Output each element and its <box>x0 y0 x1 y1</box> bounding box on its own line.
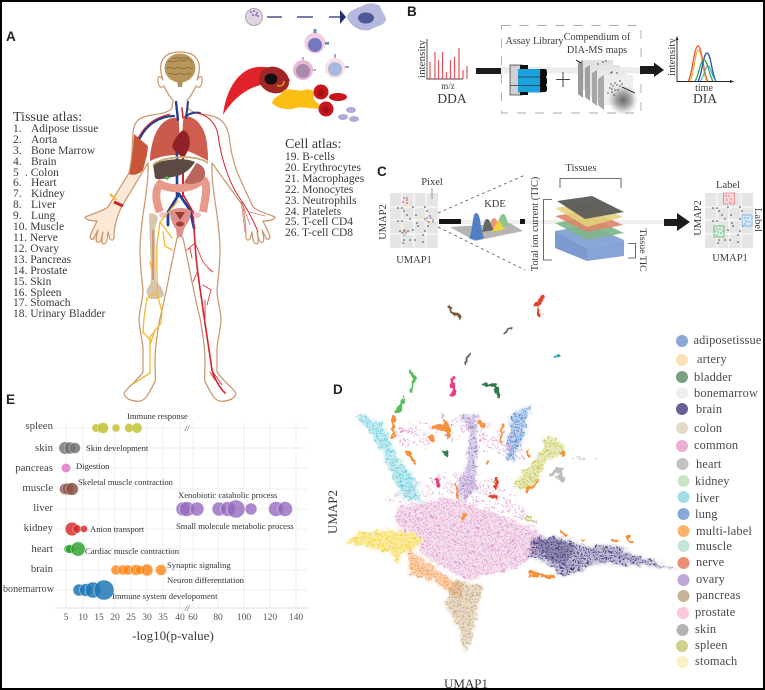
tissue atlas list: 1. <box>13 123 22 135</box>
tissue atlas list: Tissue atlas: <box>13 110 82 125</box>
legend: stomach <box>695 654 738 668</box>
tissue atlas list: 3. <box>13 145 22 157</box>
tissue atlas list: Lung <box>31 210 56 222</box>
DDA spectrum chart: DDA <box>437 91 467 106</box>
tissue atlas list: 18. Urinary Bladder <box>13 308 105 320</box>
panel C: KDE labelling workflow <box>377 163 763 272</box>
cell atlas list: 19. B-cells <box>285 151 335 163</box>
input UMAP pixel grid: UMAP1 <box>396 255 432 266</box>
category labels: spleen <box>25 420 54 432</box>
panel B: DDA to DIA workflow <box>407 4 734 115</box>
DIA chromatogram chart <box>666 36 734 106</box>
bubble annotations: Immune response <box>127 411 188 421</box>
skin clusters <box>466 328 513 363</box>
diaphragm <box>153 157 208 165</box>
tissue atlas list: Heart <box>31 177 57 189</box>
bubble annotations: Anion transport <box>90 524 145 534</box>
blood vessel cross section <box>223 62 293 115</box>
pancreas cluster <box>445 580 483 655</box>
bladder cluster <box>445 385 498 456</box>
stacked DIA map cards <box>576 60 638 115</box>
gall bladder <box>165 176 169 180</box>
nerves <box>133 201 178 384</box>
bubble annotations: Digestion <box>76 461 110 471</box>
wristband <box>114 202 123 206</box>
UMAP scatter points <box>345 297 677 655</box>
wrist tag <box>110 194 116 200</box>
x axis tick labels: 30 <box>142 612 152 623</box>
category labels: liver <box>33 502 53 514</box>
tissue atlas list: 11. Nerve <box>13 232 58 244</box>
body fill <box>85 52 275 401</box>
tissues label: Tissues <box>565 163 597 174</box>
tissue atlas list: 7. <box>13 188 22 200</box>
compendium label line 2: DIA-MS maps <box>567 45 627 56</box>
DIA chromatogram chart: DIA <box>693 91 717 106</box>
pink sparse strips <box>398 413 512 450</box>
category labels: skin <box>35 442 54 454</box>
bubble annotations: Small molecule metabolic process <box>176 521 294 531</box>
bubble annotations <box>76 411 294 601</box>
panel label C: C <box>377 164 387 179</box>
bubble annotations: Immune system developoment <box>112 591 218 601</box>
tissue atlas list: Brain <box>31 156 57 168</box>
tissue atlas list: Kidney <box>31 188 65 200</box>
dashed box <box>502 26 641 113</box>
liver <box>153 159 195 179</box>
body outline <box>85 52 275 401</box>
heart <box>172 130 190 157</box>
KDE plot <box>450 199 523 241</box>
DDA spectrum chart: intensity <box>416 40 428 78</box>
x axis title: -log10(p-value) <box>132 628 214 643</box>
x axis tick labels: 5 <box>64 612 69 623</box>
panel A: human body tissue and cell atlas <box>6 3 386 401</box>
arrow to labelled UMAP <box>664 213 690 231</box>
x axis tick labels: 120 <box>263 612 277 623</box>
multi-label cluster <box>407 547 463 597</box>
liver cluster <box>354 413 423 502</box>
legend: nerve <box>696 555 725 569</box>
nerve cluster <box>491 297 543 498</box>
assay library cartridge <box>510 65 547 95</box>
x axis tick labels: 140 <box>289 612 303 623</box>
legend: muscle <box>696 539 732 553</box>
legend: skin <box>695 622 716 636</box>
femur bone <box>147 213 164 299</box>
axis label total ion current: Total ion current (TIC) <box>530 177 541 271</box>
black arrow segment <box>476 68 501 74</box>
output labelled UMAP: Label <box>716 180 740 191</box>
veins and arteries upper body <box>138 102 265 232</box>
x axis tick labels: 35 <box>158 612 168 623</box>
tissue atlas list: Bone Marrow <box>31 145 96 157</box>
compendium label: Compendium of <box>564 32 631 43</box>
legend: colon <box>694 421 722 435</box>
dashed zoom lines <box>438 175 525 270</box>
tissue layer stack <box>555 196 624 261</box>
tissue atlas list: 12. Ovary <box>13 243 59 255</box>
legend: ovary <box>696 572 726 586</box>
tissue atlas list: Aorta <box>31 134 57 146</box>
output labelled UMAP: Label <box>752 208 763 232</box>
bonemarrow cluster <box>573 457 597 459</box>
legend: kidney <box>695 474 730 488</box>
panel label E: E <box>6 392 15 407</box>
cell atlas list <box>285 137 365 239</box>
spleen cluster <box>513 435 563 490</box>
small spleen group <box>525 518 536 520</box>
cell atlas list: 22. Monocytes <box>285 184 354 196</box>
bubble annotations: Skeletal muscle contraction <box>78 477 174 487</box>
category labels <box>3 420 54 595</box>
legend: bonemarrow <box>694 386 758 400</box>
panel E: enrichment bubble chart <box>3 392 308 643</box>
legend: prostate <box>695 605 736 619</box>
bubble annotations: Xenobiotic catabolic process <box>178 490 278 500</box>
axis label UMAP2: UMAP2 <box>325 490 340 534</box>
kidney cluster <box>398 372 414 412</box>
black connector C <box>439 219 525 224</box>
lower vessels <box>168 194 225 393</box>
legend: artery <box>697 352 727 366</box>
panel label D: D <box>333 382 343 397</box>
legend: bladder <box>694 370 733 384</box>
cell atlas list: 20. Erythrocytes <box>285 162 362 174</box>
x axis tick labels: 10 <box>78 612 88 623</box>
common cluster <box>385 415 543 580</box>
legend: multi-label <box>696 524 752 538</box>
DIA chromatogram chart: intensity <box>666 38 678 76</box>
cell atlas list: 25. T-cell CD4 <box>285 216 353 228</box>
muscle top cluster <box>450 307 459 318</box>
lungs <box>150 116 208 161</box>
tissues bracket <box>560 178 621 188</box>
tissue atlas list: 16. Spleen <box>13 287 62 299</box>
tissue atlas list: Liver <box>31 199 56 211</box>
lung cluster <box>507 404 532 460</box>
brain cluster <box>528 537 677 577</box>
bubble annotations: Skin development <box>86 443 149 453</box>
arrow to DIA <box>640 62 664 77</box>
tissue atlas list: 13. Pancreas <box>13 254 72 266</box>
input UMAP pixel grid: UMAP2 <box>378 204 389 240</box>
body illustration <box>85 52 275 401</box>
chart grid <box>55 422 308 608</box>
DIA chromatogram chart: time <box>695 83 713 94</box>
tissue TIC bracket and label <box>628 228 648 272</box>
cell differentiation: monocyte to macrophage <box>246 3 386 31</box>
bubbles <box>59 422 292 600</box>
tissue atlas list: . Colon <box>25 167 59 179</box>
T cells and B cell <box>293 29 349 80</box>
uterus and ovaries <box>159 208 201 237</box>
x axis tick labels: 20 <box>110 612 120 623</box>
grey connector C <box>460 220 667 224</box>
tissue atlas list: 8. <box>13 199 22 211</box>
stomach cluster <box>345 530 423 563</box>
bubble annotations: Cardiac muscle contraction <box>85 546 180 556</box>
plus sign <box>556 72 570 87</box>
legend: heart <box>696 457 722 471</box>
cell atlas list: 23. Neutrophils <box>285 195 357 207</box>
brain <box>164 54 196 87</box>
multi-label scattered groups <box>393 418 633 577</box>
category labels: muscle <box>22 482 53 494</box>
tissue TIC bracket and label: Tissue TIC <box>637 228 648 272</box>
output labelled UMAP: UMAP2 <box>693 200 704 236</box>
cell atlas list: 21. Macrophages <box>285 173 365 185</box>
category labels: heart <box>31 543 53 555</box>
legend: liver <box>696 491 720 505</box>
x axis tick labels: 15 <box>94 612 104 623</box>
tissue atlas list: 14. Prostate <box>13 265 67 277</box>
cell atlas list: 24. Platelets <box>285 206 342 218</box>
cell atlas list: 26. T-cell CD8 <box>285 227 353 239</box>
tissue atlas list: 10. Muscle <box>13 221 64 233</box>
prostate cluster <box>438 378 454 488</box>
grey connector bar <box>501 67 641 74</box>
category labels: kidney <box>24 522 54 534</box>
KDE plot: KDE <box>484 199 506 210</box>
x axis tick labels: 80 <box>213 612 223 623</box>
x axis tick labels: 25 <box>126 612 136 623</box>
forearm and hand skin <box>85 163 148 244</box>
output labelled UMAP <box>693 180 763 264</box>
tissue atlas list: 6. <box>13 177 22 189</box>
output labelled UMAP: UMAP1 <box>712 253 748 264</box>
DDA spectrum chart <box>416 39 467 106</box>
category labels: pancreas <box>15 462 53 474</box>
legend: pancreas <box>696 588 741 602</box>
bubble annotations: Neuron differentiation <box>167 575 245 585</box>
panel label B: B <box>407 4 417 19</box>
ovary cluster <box>458 413 478 500</box>
tissue atlas list: 9. <box>13 210 22 222</box>
legend: brain <box>696 402 722 416</box>
category labels: bonemarrow <box>3 583 54 595</box>
assay library label: Assay Library <box>506 36 564 47</box>
x axis tick labels: 40 <box>175 612 185 623</box>
x axis tick labels: 100 <box>237 612 251 623</box>
panel D: UMAP scatter <box>325 297 762 690</box>
axis break marks <box>184 424 190 613</box>
teal point <box>556 355 558 357</box>
erythrocytes <box>314 84 347 116</box>
axis break marks: // <box>184 424 190 433</box>
tissue atlas list: 5 <box>13 167 19 179</box>
input UMAP pixel grid <box>378 177 443 266</box>
bubble annotations: Synaptic signaling <box>167 560 231 570</box>
stomach <box>184 163 205 184</box>
tissue atlas list: Adipose tissue <box>31 123 98 135</box>
panel label A: A <box>6 29 16 44</box>
platelets <box>338 107 359 122</box>
legend: adiposetissue <box>694 333 762 347</box>
tissue atlas list: 15. Skin <box>13 276 52 288</box>
tissue atlas list: 17. Stomach <box>13 297 71 309</box>
tissue atlas list: 2. <box>13 134 22 146</box>
heart cluster <box>551 470 562 480</box>
legend: spleen <box>695 638 728 652</box>
colon <box>156 180 206 212</box>
legend <box>676 333 762 668</box>
x axis tick labels <box>64 612 303 623</box>
left bracket <box>544 200 552 260</box>
x axis tick labels: 60 <box>188 612 198 623</box>
cell atlas list: Cell atlas: <box>285 137 341 152</box>
category labels: brain <box>31 563 54 575</box>
axis break marks: // <box>184 604 190 613</box>
adipose tissue <box>272 89 320 109</box>
legend: lung <box>695 507 718 521</box>
input UMAP pixel grid: Pixel <box>421 177 443 188</box>
legend: common <box>694 438 738 452</box>
DDA spectrum chart: m/z <box>441 81 455 91</box>
tissue atlas list: 4. <box>13 156 22 168</box>
tissue atlas list <box>13 110 105 320</box>
muscle arm <box>129 134 148 175</box>
